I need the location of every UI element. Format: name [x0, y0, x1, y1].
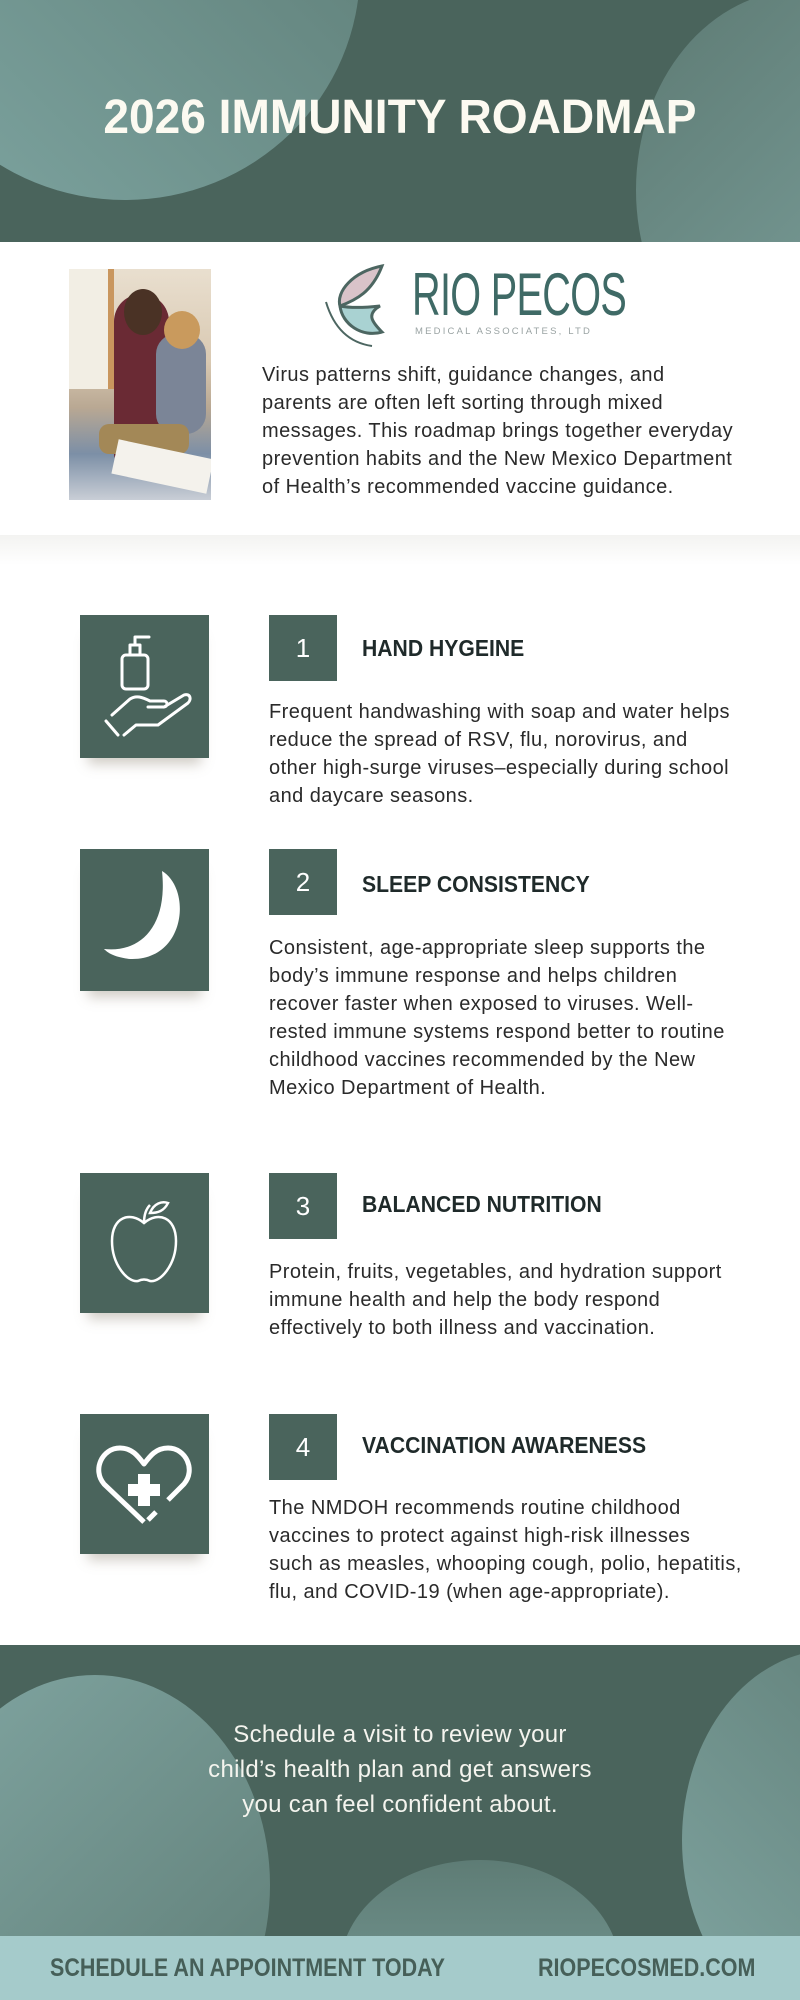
item 2: sleep: SLEEP CONSISTENCY	[362, 871, 590, 897]
item 3: nutrition: immune health and help the body respond	[269, 1289, 660, 1311]
intro text: Virus patterns shift, guidance changes, and	[262, 364, 665, 386]
item 4: vaccination: vaccines to protect against high-risk illnesses	[269, 1525, 690, 1547]
header band	[0, 0, 800, 242]
intro text: prevention habits and the New Mexico Department	[262, 448, 732, 470]
logo: MEDICAL ASSOCIATES, LTD	[415, 326, 592, 337]
item 4: vaccination: VACCINATION AWARENESS	[362, 1432, 646, 1458]
website: RIOPECOSMED.COM	[538, 1954, 755, 1982]
item 4: vaccination: such as measles, whooping cough, polio, hepatitis,	[269, 1553, 742, 1575]
footer message: Schedule a visit to review your	[233, 1721, 567, 1748]
icon: heart with cross	[80, 1414, 209, 1554]
intro text	[262, 364, 733, 498]
item 2: sleep: body’s immune response and helps children	[269, 965, 677, 987]
item 4: vaccination: flu, and COVID-19 (when age-appropriate).	[269, 1581, 670, 1603]
item 4: vaccination	[80, 1414, 742, 1603]
intro text: of Health’s recommended vaccine guidance.	[262, 476, 674, 498]
item 2: sleep: rested immune systems respond better to routine	[269, 1021, 725, 1043]
intro text: messages. This roadmap brings together everyday	[262, 420, 733, 442]
item 3: nutrition	[80, 1173, 722, 1339]
item 4: vaccination: The NMDOH recommends routine childhood	[269, 1497, 681, 1519]
photo: mother and child reading	[69, 269, 211, 500]
footer message: child’s health plan and get answers	[208, 1756, 592, 1783]
item 1: hand hygiene: other high-surge viruses–especially during school	[269, 757, 729, 779]
icon: hand soap	[80, 615, 209, 758]
logo text: RIO PECOS	[412, 261, 626, 328]
item 1: hand hygiene: HAND HYGEINE	[362, 635, 524, 661]
item 3: nutrition: Protein, fruits, vegetables, and hydration support	[269, 1261, 722, 1283]
footer call-to-action panel	[0, 1645, 800, 1936]
item 2: sleep: Consistent, age-appropriate sleep supports the	[269, 937, 706, 959]
item 4: vaccination: 4	[296, 1432, 310, 1462]
item 2: sleep: Mexico Department of Health.	[269, 1077, 546, 1099]
item 2: sleep: 2	[296, 866, 310, 896]
item 3: nutrition: BALANCED NUTRITION	[362, 1191, 602, 1217]
item 2: sleep: childhood vaccines recommended by the New	[269, 1049, 695, 1071]
item 2: sleep: recover faster when exposed to viruses. Well-	[269, 993, 694, 1015]
logo	[325, 261, 626, 347]
bottom bar	[0, 1936, 800, 2000]
item 3: nutrition: 3	[296, 1190, 310, 1220]
icon: apple	[80, 1173, 209, 1313]
icon: butterfly	[325, 264, 385, 347]
footer message: you can feel confident about.	[242, 1791, 558, 1818]
item 1: hand hygiene: Frequent handwashing with soap and water helps	[269, 701, 730, 723]
item 1: hand hygiene: 1	[296, 632, 310, 662]
item 1: hand hygiene	[80, 615, 730, 807]
footer message	[208, 1721, 592, 1818]
item 2: sleep	[80, 849, 725, 1099]
cta text: SCHEDULE AN APPOINTMENT TODAY	[50, 1954, 445, 1982]
icon: moon	[80, 849, 209, 991]
shadow band divider	[0, 535, 800, 565]
item 1: hand hygiene: reduce the spread of RSV, flu, norovirus, and	[269, 729, 688, 751]
item 3: nutrition: effectively to both illness and vaccination.	[269, 1317, 655, 1339]
title: 2026 IMMUNITY ROADMAP	[103, 91, 697, 144]
item 1: hand hygiene: and daycare seasons.	[269, 785, 474, 807]
intro text: parents are often left sorting through mixed	[262, 392, 663, 414]
